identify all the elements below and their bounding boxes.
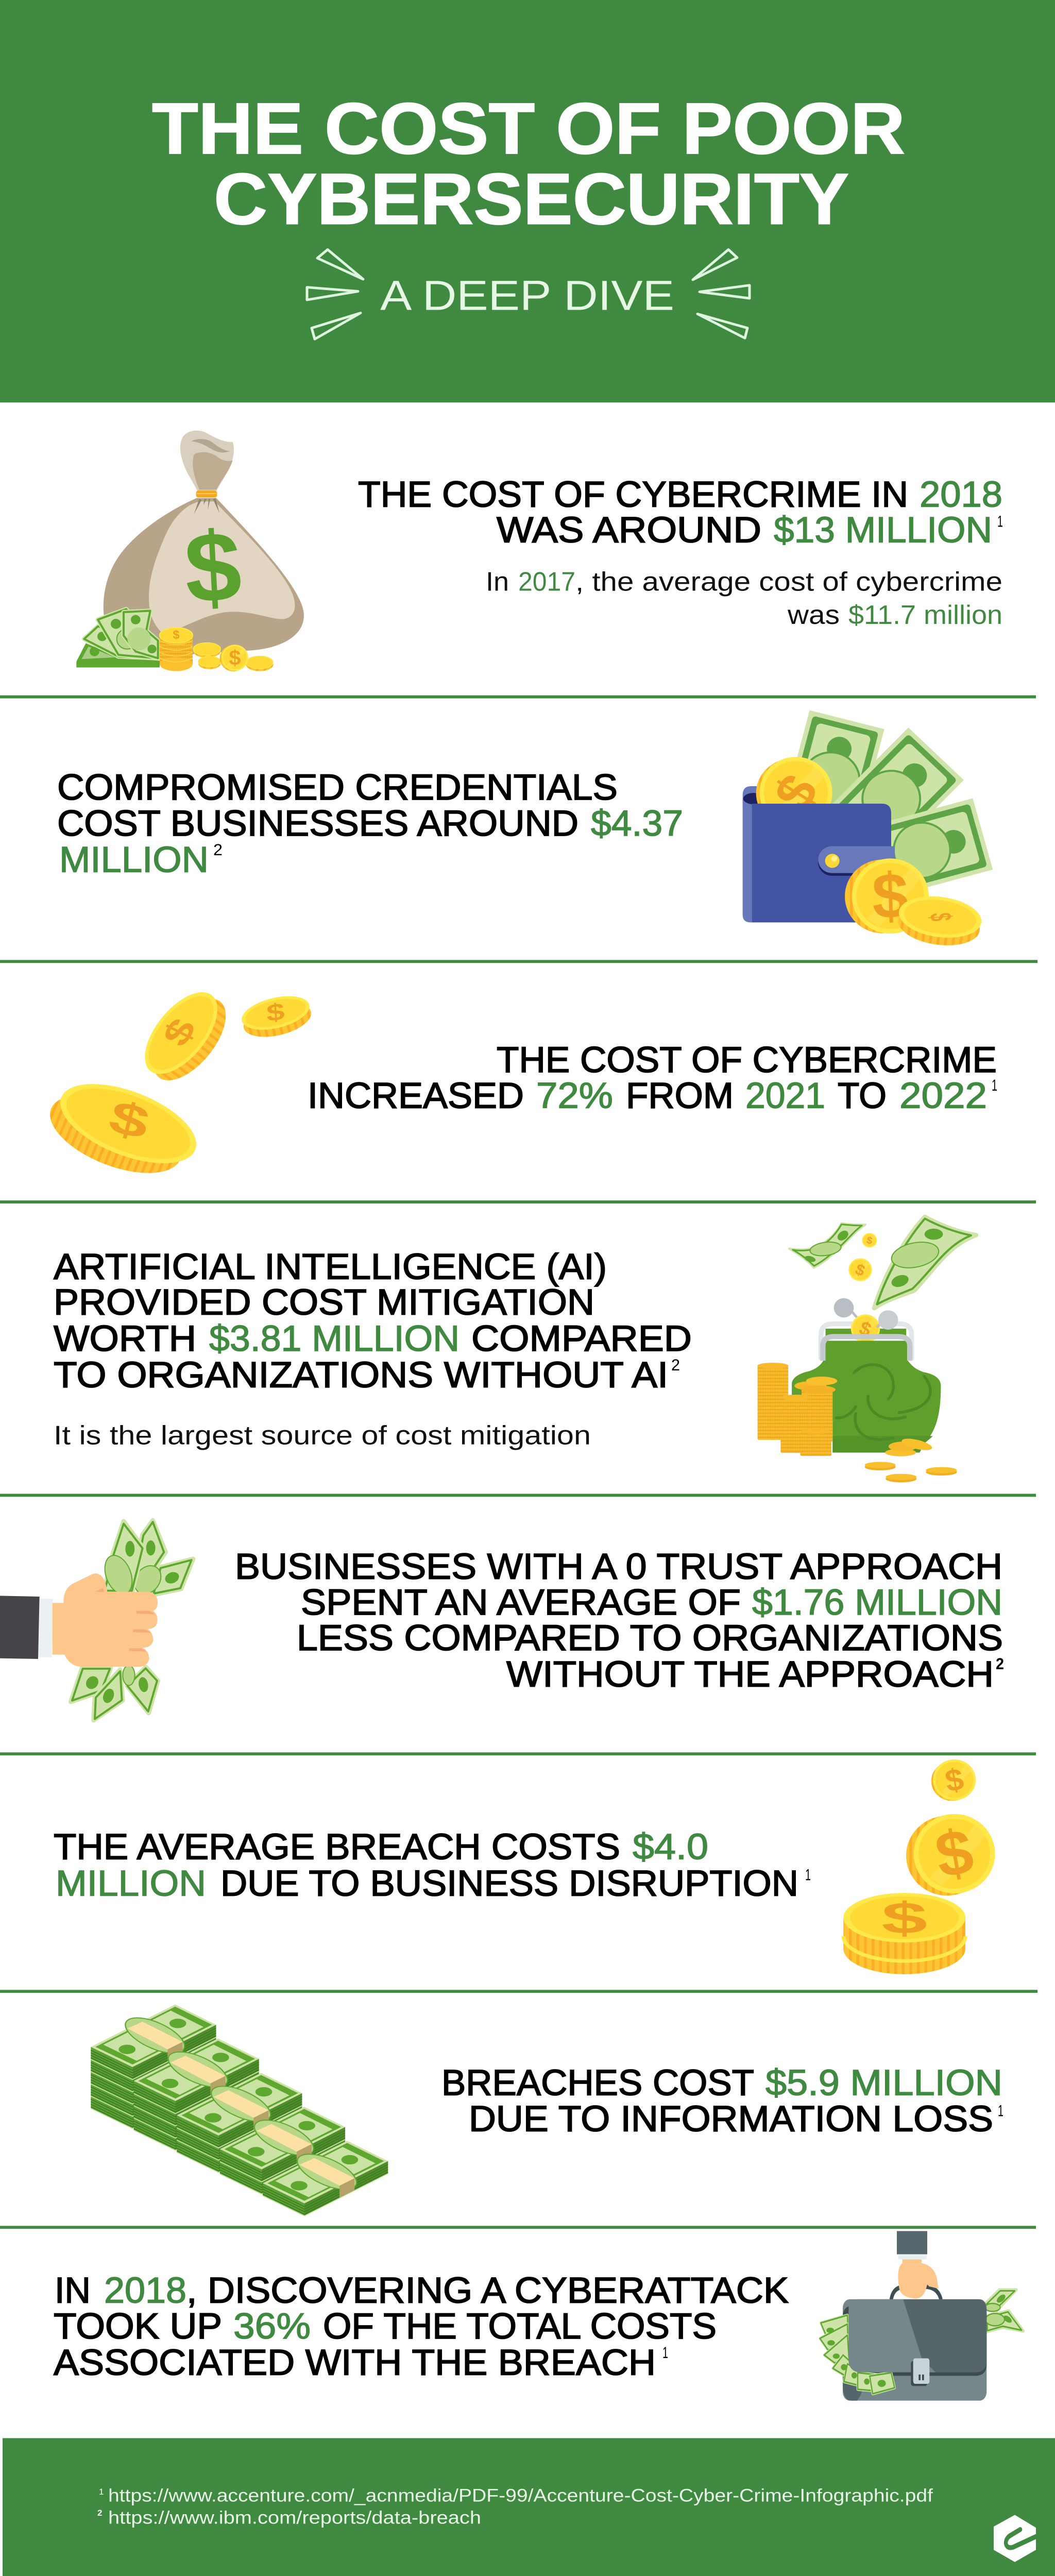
- heading: THE COST OF CYBERCRIME: [497, 1040, 997, 1080]
- heading: TO: [838, 1076, 887, 1116]
- icon: money bag: $: [229, 646, 241, 670]
- icon: money bag: $: [173, 628, 180, 641]
- heading: 36%: [233, 2307, 311, 2347]
- heading: 1: [992, 1076, 997, 1094]
- heading: COMPROMISED CREDENTIALS: [57, 768, 618, 808]
- footer banner: [3, 2438, 1055, 2576]
- icon: stacked coins: $: [881, 1894, 927, 1943]
- supporting text: , the average cost of cybercrime: [575, 567, 1002, 597]
- icon: wallet with cash: $: [924, 912, 958, 922]
- supporting text: 2017: [518, 567, 575, 597]
- heading: 1: [805, 1866, 811, 1884]
- heading: 1: [662, 2343, 668, 2362]
- icon: logo: [994, 2515, 1036, 2562]
- heading: ASSOCIATED WITH THE BREACH: [54, 2343, 656, 2383]
- heading: [54, 1247, 692, 1395]
- title: [152, 88, 905, 240]
- heading: OF THE TOTAL COSTS: [323, 2307, 717, 2347]
- panel: average breach costs: [54, 1759, 995, 1974]
- heading: , DISCOVERING A CYBERATTACK: [186, 2270, 789, 2311]
- heading: [235, 1547, 1004, 1694]
- heading: ARTIFICIAL INTELLIGENCE (AI): [54, 1247, 607, 1287]
- icon: hand gripping cash: [0, 1520, 193, 1720]
- icon: money bag: $: [182, 511, 244, 624]
- heading: DUE TO BUSINESS DISRUPTION: [220, 1863, 798, 1904]
- icon: green purse with coins: $: [853, 1261, 867, 1280]
- heading: COST BUSINESSES AROUND: [57, 804, 578, 844]
- panel: zero trust approach: [0, 1520, 1004, 1720]
- heading: 2021: [745, 1076, 825, 1116]
- icon: burst rays: [307, 249, 750, 339]
- header banner: [0, 0, 1055, 402]
- heading: THE COST OF CYBERCRIME IN: [358, 474, 908, 515]
- heading: 2: [213, 841, 223, 859]
- heading: THE AVERAGE BREACH COSTS: [54, 1827, 620, 1867]
- icon: stacks of bills: [91, 2005, 388, 2216]
- icon: flying coins: $: [155, 1012, 205, 1053]
- heading: COMPARED: [471, 1319, 692, 1359]
- heading: 2018: [104, 2270, 186, 2311]
- heading: $3.81 MILLION: [209, 1319, 460, 1359]
- heading: 1: [998, 2102, 1003, 2120]
- icon: flying coins: $: [104, 1091, 155, 1149]
- sources: 1: [99, 2487, 104, 2497]
- heading: DUE TO INFORMATION LOSS: [469, 2099, 993, 2140]
- heading: WITHOUT THE APPROACH: [506, 1654, 994, 1694]
- heading: 1: [997, 512, 1003, 530]
- panel: cybercrime increase: [39, 980, 997, 1193]
- panel: information loss: [91, 2005, 1003, 2216]
- supporting text: was: [787, 600, 840, 630]
- heading: MILLION: [59, 840, 209, 880]
- heading: INCREASED: [308, 1076, 524, 1116]
- supporting text: $11.7 million: [848, 600, 1002, 630]
- heading: $5.9 MILLION: [765, 2063, 1002, 2103]
- icon: stacked coins: $: [943, 1761, 966, 1798]
- sources: https://www.accenture.com/_acnmedia/PDF-99/Accenture-Cost-Cyber-Crime-Infographic.pdf: [108, 2485, 933, 2505]
- heading: [441, 2063, 1003, 2140]
- heading: LESS COMPARED TO ORGANIZATIONS: [297, 1618, 1003, 1658]
- heading: BUSINESSES WITH A 0 TRUST APPROACH: [235, 1547, 1002, 1587]
- heading: [358, 474, 1003, 551]
- icon: stacked coins: $: [930, 1816, 978, 1891]
- heading: $1.76 MILLION: [752, 1583, 1002, 1623]
- icon: wallet with cash: $: [871, 859, 910, 932]
- heading: 2: [671, 1356, 680, 1374]
- icon: green purse with coins: $: [857, 1317, 874, 1341]
- heading: 72%: [536, 1076, 613, 1116]
- heading: SPENT AN AVERAGE OF: [301, 1583, 741, 1623]
- icon: wallet with cash: $: [762, 764, 830, 821]
- icon: wallet with cash: [743, 710, 993, 950]
- supporting text: In: [486, 567, 509, 597]
- panel: discovering a cyberattack: [54, 2231, 1024, 2401]
- icon: stacked coins: [843, 1759, 995, 1974]
- panel: artificial intelligence mitigation: [54, 1217, 976, 1482]
- heading: [54, 2270, 789, 2383]
- heading: FROM: [626, 1076, 734, 1116]
- panel: compromised credentials: [57, 710, 993, 950]
- sources: https://www.ibm.com/reports/data-breach: [108, 2507, 481, 2528]
- heading: TO ORGANIZATIONS WITHOUT AI: [54, 1355, 668, 1395]
- heading: [308, 1040, 997, 1116]
- icon: briefcase with cash: [820, 2231, 1024, 2401]
- heading: 2022: [899, 1076, 987, 1116]
- heading: [57, 768, 683, 880]
- heading: MILLION: [56, 1863, 206, 1904]
- title: CYBERSECURITY: [214, 159, 849, 240]
- heading: 2: [996, 1655, 1004, 1673]
- panel: cost of cybercrime 2018: [76, 431, 1003, 671]
- heading: IN: [55, 2270, 91, 2311]
- heading: $4.37: [591, 804, 683, 844]
- heading: WAS AROUND: [497, 510, 761, 551]
- heading: $13 MILLION: [774, 510, 992, 551]
- subtitle: A DEEP DIVE: [380, 272, 674, 319]
- heading: WORTH: [54, 1319, 196, 1359]
- heading: 2018: [920, 474, 1002, 515]
- heading: TOOK UP: [54, 2307, 222, 2347]
- supporting text: [486, 567, 1002, 630]
- sources: [97, 2485, 933, 2528]
- heading: BREACHES COST: [441, 2063, 754, 2103]
- heading: $4.0: [633, 1827, 708, 1867]
- sources: 2: [97, 2508, 102, 2518]
- icon: green purse with coins: [757, 1217, 976, 1482]
- icon: money bag: [76, 431, 304, 671]
- title: THE COST OF POOR: [152, 88, 905, 169]
- heading: PROVIDED COST MITIGATION: [54, 1283, 594, 1323]
- icon: green purse with coins: $: [865, 1235, 873, 1247]
- heading: [54, 1827, 811, 1904]
- supporting text: It is the largest source of cost mitigation: [54, 1421, 591, 1451]
- icon: flying coins: $: [266, 998, 285, 1027]
- icon: flying coins: [39, 980, 315, 1193]
